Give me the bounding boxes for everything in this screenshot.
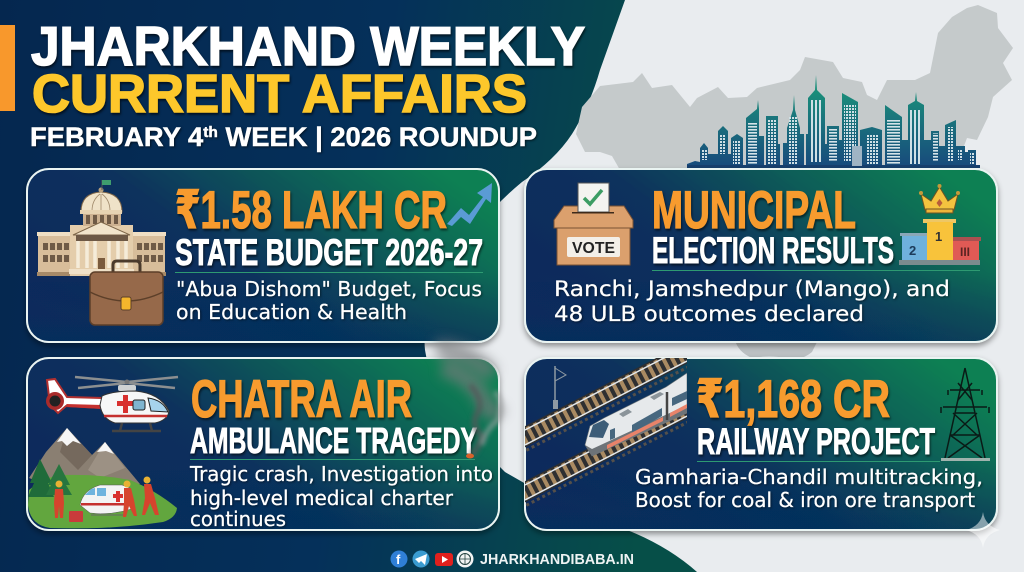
icon: telegram [412, 550, 430, 568]
icon: facebook [390, 550, 408, 568]
description line 3: continues [190, 507, 286, 531]
divider [652, 270, 980, 271]
website text: JHARKHANDIBABA.IN [480, 551, 634, 568]
description line 2: Boost for coal & iron ore transport [635, 488, 975, 512]
upper track [525, 358, 687, 448]
footer social and website [390, 550, 634, 568]
smoke plume [436, 348, 501, 458]
card background [27, 358, 499, 530]
panel: state budget [27, 169, 499, 342]
subheading: STATE BUDGET 2026-27 [175, 232, 483, 273]
description: "Abua Dishom" Budget, Focus [176, 277, 482, 301]
icon: government building [37, 180, 166, 276]
map lower lobe [735, 340, 818, 359]
description line 2: 48 ULB outcomes declared [554, 302, 864, 326]
fire spot [466, 454, 474, 458]
heading: ₹1.58 LAKH CR [175, 181, 447, 240]
icon: helicopter [46, 377, 178, 431]
divider [190, 459, 475, 460]
icon: power tower [941, 368, 990, 461]
divider [175, 272, 483, 273]
sparkle [966, 512, 1000, 548]
subtitle: th [203, 124, 218, 141]
subtitle: FEBRUARY 4 [30, 122, 198, 152]
background dark swoosh [0, 0, 697, 572]
icon: briefcase [90, 261, 163, 325]
title block [0, 15, 585, 152]
title line 1: JHARKHAND WEEKLY [31, 15, 585, 77]
subheading: AMBULANCE TRAGEDY [190, 420, 477, 461]
card background [525, 358, 997, 530]
description line 2: high-level medical charter [190, 486, 454, 510]
card background [525, 169, 997, 342]
icon: podium and crown [899, 184, 981, 265]
panel: municipal election [525, 169, 997, 342]
icon: signal pole [553, 366, 566, 409]
description: Gamharia-Chandil multitracking, [635, 465, 983, 489]
icon: ballot box [554, 183, 633, 265]
description line 2: on Education & Health [176, 300, 407, 324]
map of Jharkhand silhouette [576, 5, 1013, 170]
subheading: ELECTION RESULTS [652, 230, 894, 271]
icon: podium and crown: 1 [935, 229, 942, 244]
icon: podium and crown: 2 [909, 243, 916, 258]
lower track [525, 414, 687, 502]
panel: chatra air ambulance [27, 358, 499, 531]
description: Ranchi, Jamshedpur (Mango), and [554, 277, 950, 301]
accent bar [0, 25, 15, 111]
icon: railway tracks and train [525, 358, 687, 506]
divider [697, 461, 940, 462]
icon: facebook: f [396, 552, 401, 567]
heading: CHATRA AIR [191, 370, 412, 429]
heading: ₹1,168 CR [696, 370, 890, 429]
icon: globe [456, 550, 474, 568]
icon: ballot box: VOTE [572, 240, 615, 257]
panel: railway project [515, 346, 997, 530]
description: Tragic crash, Investigation into [189, 462, 493, 486]
city skyline [687, 75, 980, 168]
icon: growth arrow [447, 183, 492, 226]
icon: podium and crown: III [960, 245, 970, 259]
subtitle: WEEK | 2026 ROUNDUP [218, 122, 537, 152]
icon: mountains and rescue scene [28, 428, 177, 528]
icon: youtube [435, 553, 453, 566]
card background [27, 169, 499, 342]
title line 2: CURRENT AFFAIRS [32, 64, 527, 124]
train [585, 373, 687, 456]
heading: MUNICIPAL [652, 181, 856, 240]
